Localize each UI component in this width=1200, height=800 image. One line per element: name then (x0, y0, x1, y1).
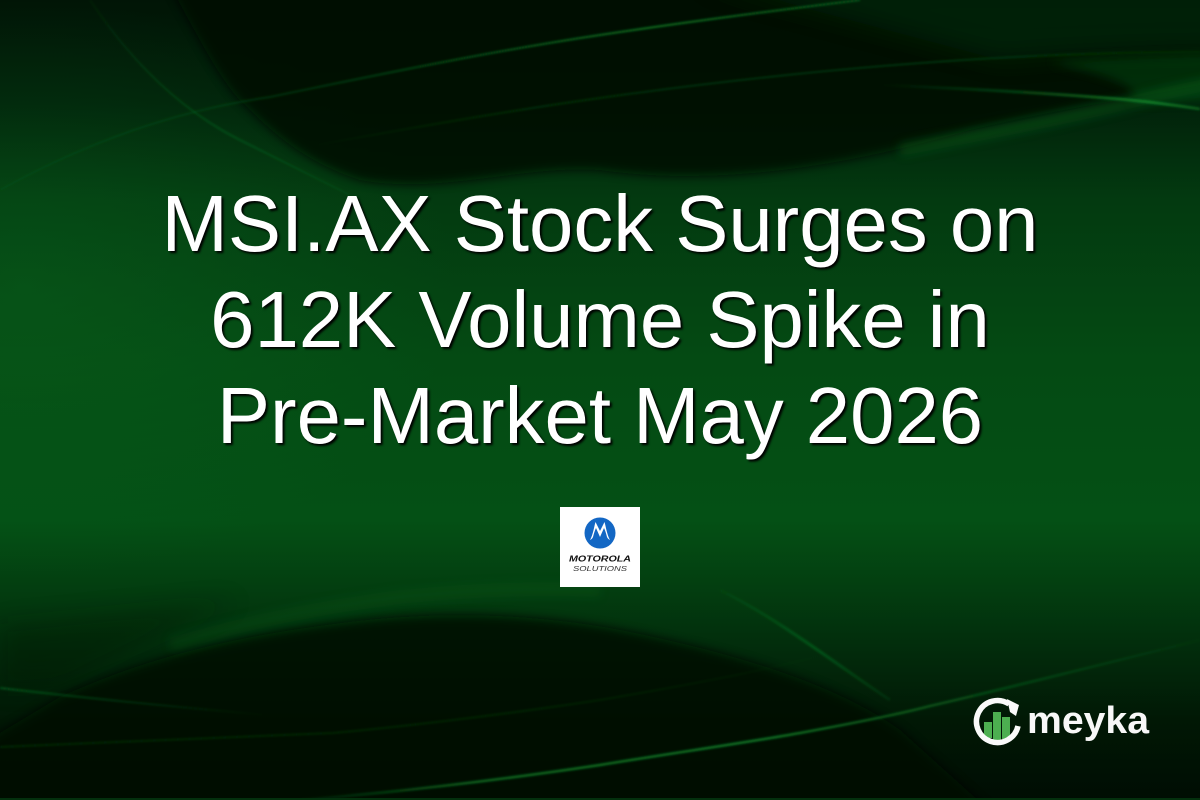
title: Pre-Market May 2026 (217, 371, 983, 460)
top dark sweep (167, 0, 1200, 184)
top swoosh highlights (900, 82, 1200, 150)
icon: meyka chart ring (976, 699, 1019, 743)
title: 612K Volume Spike in (210, 275, 990, 364)
bottom swoosh highlights (170, 589, 600, 645)
logo: Motorola Solutions (560, 507, 640, 587)
title (162, 179, 1038, 463)
wordmark: MOTOROLA: MOTOROLA (569, 554, 631, 564)
icon: Motorola circle mark (584, 518, 616, 548)
bottom dark hump (0, 600, 240, 690)
title: MSI.AX Stock Surges on (162, 179, 1038, 268)
wordmark: SOLUTIONS: SOLUTIONS (573, 564, 627, 573)
logo: meyka (974, 698, 1150, 746)
wordmark: meyka: meyka (1027, 700, 1150, 742)
